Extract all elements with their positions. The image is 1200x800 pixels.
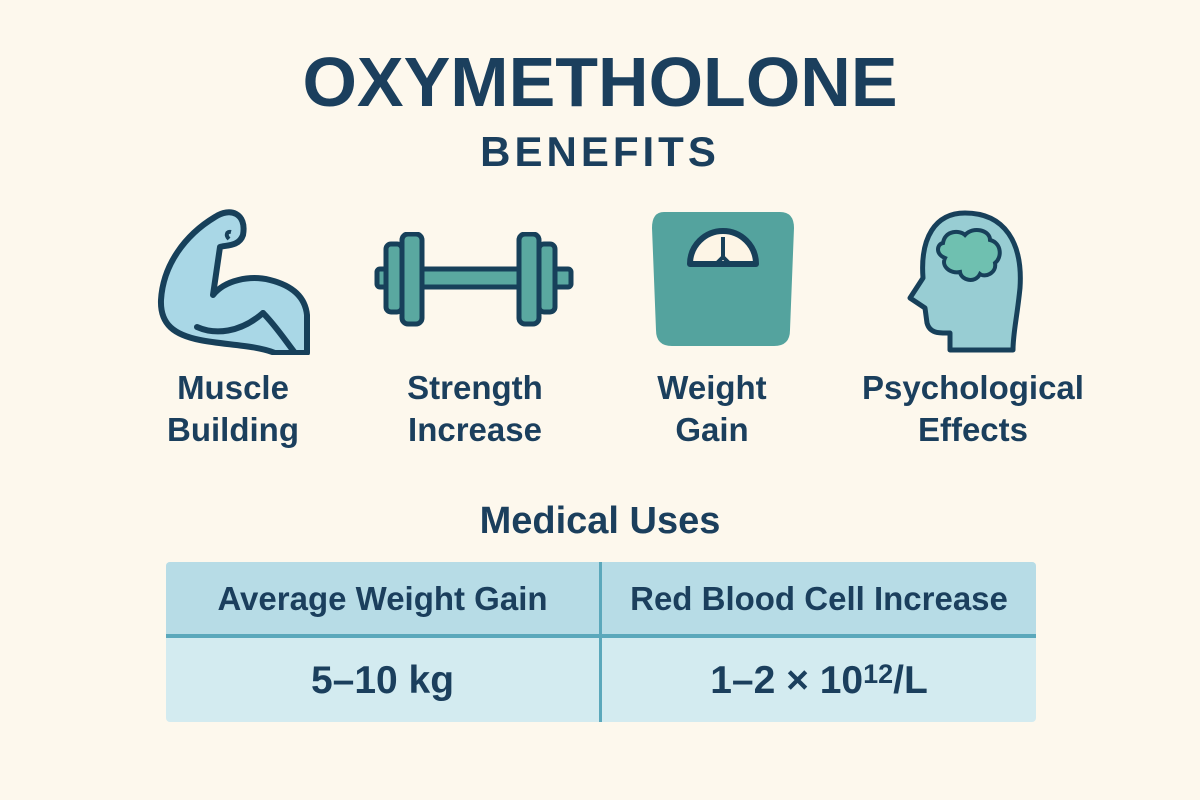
icon: dumbbell — [374, 232, 574, 326]
subtitle: BENEFITS — [480, 128, 720, 175]
heading: medical uses: Medical Uses — [480, 500, 720, 542]
label: psychological effects: Psychological — [862, 369, 1084, 406]
label: psychological effects — [862, 369, 1084, 448]
label: strength increase — [407, 369, 543, 448]
table header — [166, 562, 1036, 638]
label: psychological effects: Effects — [918, 411, 1028, 448]
label: strength increase: Strength — [407, 369, 543, 406]
label: weight gain: Gain — [675, 411, 749, 448]
label: muscle building: Building — [167, 411, 299, 448]
label: muscle building: Muscle — [177, 369, 289, 406]
title: OXYMETHOLONE — [302, 43, 898, 121]
header: average weight gain: Average Weight Gain — [217, 580, 548, 617]
label: muscle building — [167, 369, 299, 448]
label: strength increase: Increase — [408, 411, 542, 448]
value: 5-10 kg: 5–10 kg — [311, 659, 454, 702]
label: weight gain: Weight — [657, 369, 767, 406]
icon: flexed arm — [158, 209, 310, 355]
label: weight gain — [657, 369, 767, 448]
value: 1-2 x 10^12/L: 1–2 × 1012/L — [710, 659, 928, 702]
icon: scale — [652, 212, 794, 346]
icon: head with brain — [908, 210, 1023, 352]
table — [166, 562, 1036, 722]
header: red blood cell increase: Red Blood Cell Increase — [630, 580, 1008, 617]
